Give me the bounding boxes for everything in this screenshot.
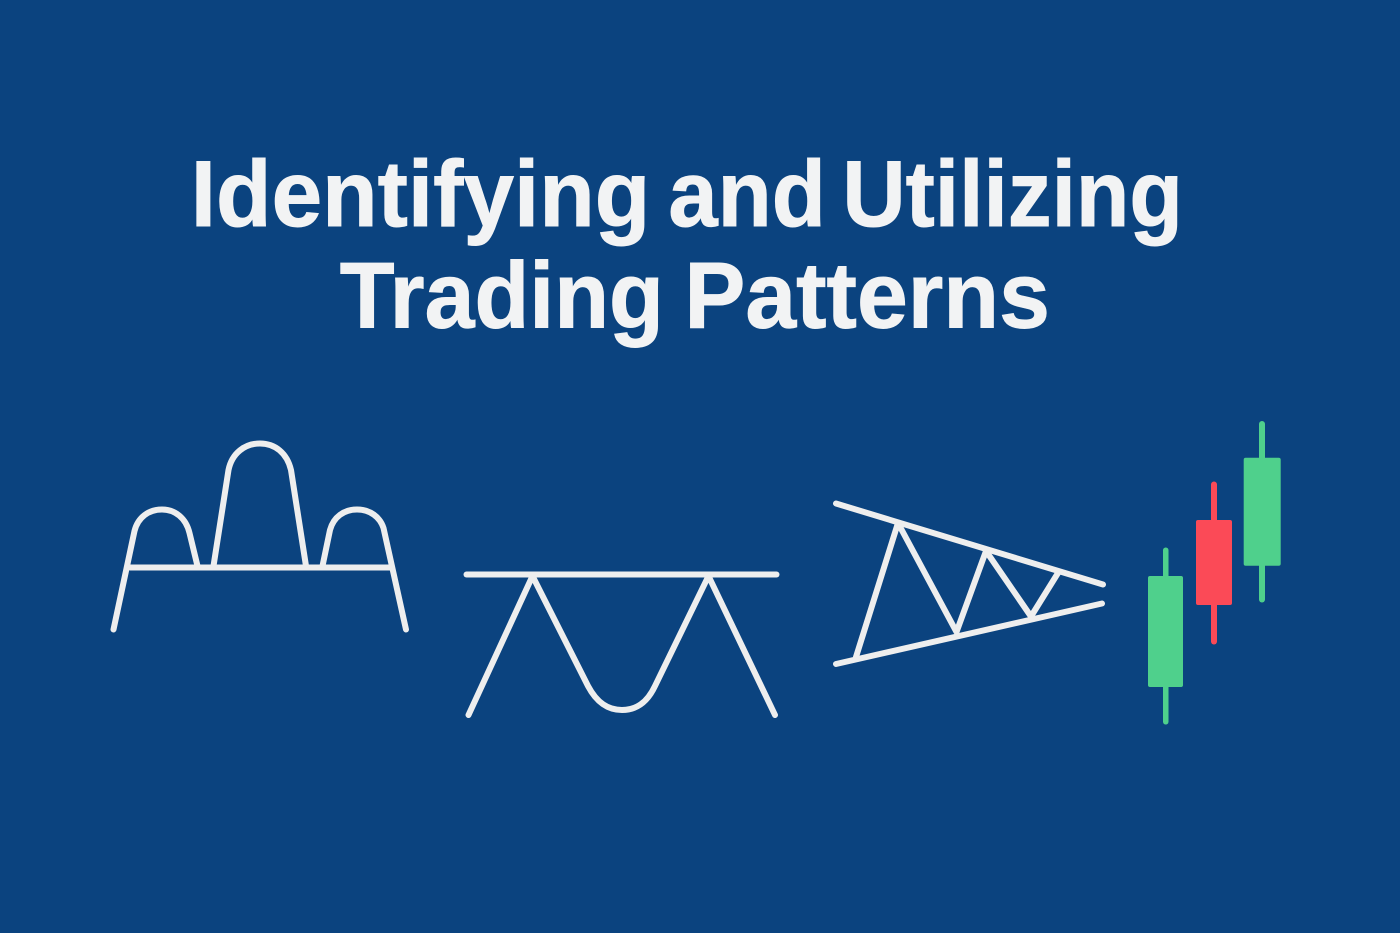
title: Patterns (684, 243, 1050, 348)
green candle right (1244, 421, 1281, 602)
icon: candlesticks (1148, 421, 1281, 724)
title: and (668, 141, 826, 246)
title: Utilizing (842, 141, 1183, 246)
icon: cup and rim pattern (466, 574, 776, 715)
red candle (1196, 482, 1232, 644)
title: Trading (340, 243, 664, 348)
green candle left (1148, 548, 1183, 724)
icon: head and shoulders pattern (114, 444, 406, 630)
title: Identifying (191, 141, 650, 246)
title (191, 141, 1183, 348)
icon: wedge pattern (836, 504, 1103, 664)
